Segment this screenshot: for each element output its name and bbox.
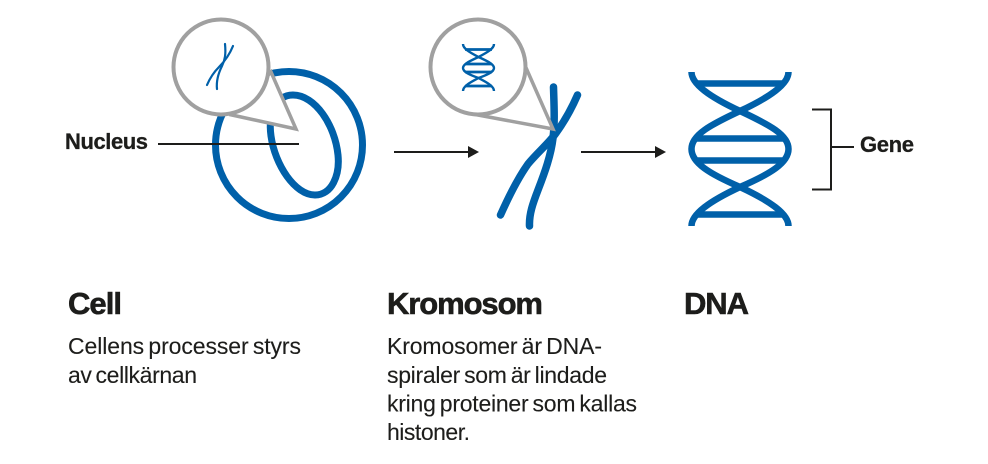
text: Kromosom description: spiraler som är lindade [387,362,607,388]
gene label: Gene [860,132,914,157]
heading: Cell: Cell [68,286,122,321]
text: Kromosom description [387,333,637,445]
arrow: chromosome to DNA [581,146,666,158]
nucleus leader line [158,143,299,145]
nucleus [270,95,338,195]
chromosome illustration [430,20,578,226]
cell membrane [216,72,362,218]
chromosome strands [500,87,578,226]
heading: Kromosom: Kromosom [387,286,543,321]
text: Kromosom description: kring proteiner som kallas [387,390,637,416]
cell illustration [158,20,362,218]
text: Cell description [68,333,301,388]
magnifier circle with DNA [430,20,526,114]
magnifier circle with chromosome [174,20,268,114]
arrow: cell to chromosome [394,146,479,158]
text: Cell description: Cellens processer styrs [68,333,301,359]
gene bracket [812,110,854,190]
heading: DNA: DNA [684,286,749,321]
text: Kromosom description: histoner. [387,419,470,445]
magnifier pointer [232,72,296,129]
DNA helix [692,72,788,226]
text: Cell description: av cellkärnan [68,362,197,388]
nucleus label: Nucleus [65,129,148,154]
magnifier pointer [478,70,553,129]
text: Kromosom description: Kromosomer är DNA- [387,333,602,359]
